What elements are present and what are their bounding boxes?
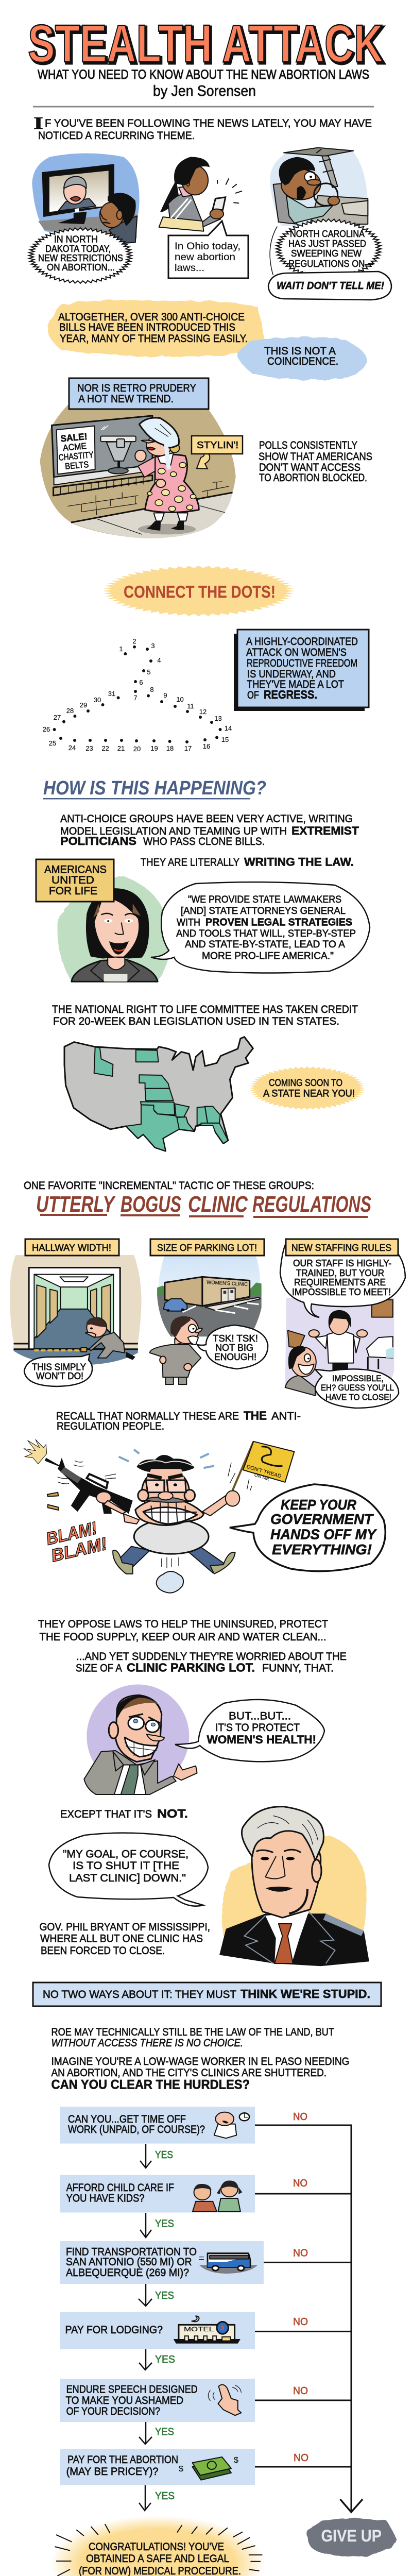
callout: regress: THEY'VE MADE A LOT <box>247 679 344 690</box>
speech bubble: proven legal strategies: PROVEN LEGAL STRATEGIES <box>205 917 352 928</box>
connect-the-dots puzzle <box>43 637 232 753</box>
speech bubble: wait: WAIT! DON'T TELL ME! <box>277 280 384 292</box>
panel: protect women's health politician <box>84 1684 324 1794</box>
text: they oppose laws: THEY OPPOSE LAWS TO HELP THE UNINSURED, PROTECT <box>38 1618 328 1630</box>
text: suddenly worried: FUNNY, THAT. <box>262 1662 334 1674</box>
heading: utterly bogus clinic regulations: CLINIC <box>188 1192 248 1217</box>
flag text: don't tread on me <box>244 1464 282 1485</box>
burst: north dakota: ON ABORTION... <box>47 262 115 273</box>
box: transportation <box>60 2241 264 2284</box>
text: incremental tactic: ONE FAVORITE "INCREMENTAL" TACTIC OF THESE GROUPS: <box>24 1180 314 1192</box>
burst: north carolina <box>276 219 381 279</box>
text: anti-regulation people: ANTI- <box>271 1411 301 1422</box>
connect-the-dots puzzle: 29 <box>80 701 87 709</box>
speech bubble: but it's to protect women's health: BUT...BUT... <box>229 1710 291 1722</box>
speech bubble: impossible to meet: TRAINED, BUT YOUR <box>296 1268 384 1278</box>
sign: chastity belts sale: CHASTITY <box>58 450 94 463</box>
callout: regress: ATTACK ON WOMEN'S <box>246 647 347 658</box>
speech bubble: keep your government hands off: GOVERNMENT <box>270 1511 374 1527</box>
text: except that it's not <box>60 1807 188 1820</box>
sound effect: blam: BLAM! <box>44 1518 99 1549</box>
illustration: gun-toting tea partier <box>24 1439 385 1593</box>
connect-the-dots puzzle: 7 <box>133 694 138 702</box>
box: lodging <box>60 2312 255 2349</box>
box: lodging: MOTEL <box>184 2326 214 2333</box>
intro text: I <box>33 114 43 133</box>
labels: no: NO <box>294 2452 308 2464</box>
box: pay for abortion: PAY FOR THE ABORTION <box>67 2454 178 2466</box>
portrait: gov. phil bryant <box>219 1807 369 1966</box>
burst: coming soon: A STATE NEAR YOU! <box>263 1088 355 1099</box>
text: roe and hurdles: WITHOUT ACCESS THERE IS NO CHOICE. <box>52 2037 243 2049</box>
box: shaming speech: TO MAKE YOU ASHAMED <box>66 2395 183 2406</box>
box: shaming speech: ENDURE SPEECH DESIGNED <box>66 2383 198 2396</box>
speech bubble: my goal <box>49 1833 208 1906</box>
caption: not a coincidence <box>238 337 367 380</box>
text: anti-choice groups <box>60 813 359 848</box>
speech bubble: proven legal strategies: AND STATE-BY-STATE, LEAD TO A <box>185 939 345 950</box>
box: pay for abortion <box>60 2449 255 2485</box>
speech bubble: proven legal strategies: [AND] STATE ATTORNEYS GENERAL <box>181 906 346 917</box>
box: time off work: WORK (UNPAID, OF COURSE)? <box>68 2124 205 2136</box>
callout: ohio: laws... <box>175 263 204 274</box>
callout: they must think we're stupid: NO TWO WAYS ABOUT IT: THEY MUST <box>43 1989 236 2001</box>
outcome: congratulations <box>50 2516 265 2576</box>
heading: how is this happening: HOW IS THIS HAPPENING? <box>43 777 266 799</box>
speech bubble: proven legal strategies: AND TOOLS THAT WILL, STEP-BY-STEP <box>176 928 356 939</box>
labels: no: NO <box>293 2385 308 2397</box>
text: roe and hurdles: CAN YOU CLEAR THE HURDLES? <box>52 2078 250 2092</box>
speech bubble: impossible to meet: OUR STAFF IS HIGHLY- <box>293 1258 391 1268</box>
caption: gov. phil bryant: WHERE ALL BUT ONE CLINIC HAS <box>40 1933 203 1944</box>
speech bubble: proven legal strategies <box>151 882 370 973</box>
text: roe and hurdles: IMAGINE YOU'RE A LOW-WAGE WORKER IN EL PASO NEEDING <box>52 2056 349 2067</box>
text: polls: TO ABORTION BLOCKED. <box>259 472 367 484</box>
intro text: NOTICED A RECURRING THEME. <box>38 130 195 142</box>
speech bubble: impossible to meet: IMPOSSIBLE TO MEET! <box>292 1287 391 1297</box>
burst: north dakota: IN NORTH <box>54 234 98 244</box>
box: shaming speech: OF YOUR DECISION? <box>66 2405 160 2417</box>
text: roe and hurdles: AN ABORTION, AND THE CITY'S CLINICS ARE SHUTTERED. <box>52 2067 327 2079</box>
burst: north dakota <box>29 228 132 283</box>
connect-the-dots puzzle: 25 <box>49 739 56 747</box>
flag text: don't tread on me: DON'T TREAD <box>246 1464 282 1480</box>
connect-the-dots puzzle: 6 <box>139 679 143 686</box>
panel: retro prudery <box>40 378 243 538</box>
speech bubble: impossible to meet: REQUIREMENTS ARE <box>294 1277 386 1287</box>
text: anti-regulation people: REGULATION PEOPLE. <box>57 1420 164 1432</box>
connect-the-dots puzzle: 12 <box>199 708 207 716</box>
callout: ohio <box>168 221 248 278</box>
panel: hallway width <box>10 1239 142 1386</box>
map: states with 20-week bans <box>64 1037 253 1151</box>
callout: regress: IS UNDERWAY, AND <box>247 668 336 680</box>
callout: regress: A HIGHLY-COORDINATED <box>246 636 358 648</box>
labels: no <box>293 2111 308 2464</box>
callout: they must think we're stupid: THINK WE'RE STUPID. <box>241 1987 370 2001</box>
text: anti-regulation people: THE <box>244 1409 267 1422</box>
labels: yes: YES <box>155 2490 175 2502</box>
box: time off work: CAN YOU...GET TIME OFF <box>68 2113 186 2125</box>
callout: ohio: In Ohio today, <box>175 241 241 252</box>
speech bubble: but it's to protect women's health: WOMEN'S HEALTH! <box>207 1733 316 1746</box>
text: writing the law: WRITING THE LAW. <box>244 856 354 869</box>
box: pay for abortion: $ <box>179 2465 183 2473</box>
connect-the-dots puzzle: 3 <box>151 642 155 650</box>
box: time off work <box>60 2107 255 2144</box>
speech bubble: keep your government hands off: EVERYTHING! <box>272 1541 372 1557</box>
speech bubble: but it's to protect women's health <box>175 1700 324 1761</box>
connect-the-dots puzzle: 5 <box>147 668 151 676</box>
speech bubble: proven legal strategies: "WE PROVIDE STATE LAWMAKERS <box>188 894 341 905</box>
connect-the-dots puzzle: 24 <box>68 744 76 752</box>
speech bubble: my goal: LAST CLINIC] DOWN." <box>69 1872 186 1884</box>
sign: chastity belts sale: ACME <box>62 441 87 453</box>
labels: no: NO <box>293 2178 307 2189</box>
caption: gov. phil bryant <box>39 1921 210 1957</box>
outcome: congratulations: OBTAINED A SAFE AND LEGAL <box>86 2553 229 2565</box>
text: national right to life: THE NATIONAL RIGHT TO LIFE COMMITTEE HAS TAKEN CREDIT <box>52 1004 358 1015</box>
sound effect: blam <box>44 1517 109 1566</box>
speech bubble: keep your government hands off: HANDS OFF MY <box>270 1527 377 1543</box>
labels: yes: YES <box>155 2290 174 2301</box>
callout: ohio: new abortion <box>175 252 235 263</box>
text: except that it's not: EXCEPT THAT IT'S <box>60 1808 152 1820</box>
label: hallway width <box>25 1239 119 1256</box>
text: polls: DON'T WANT ACCESS <box>259 462 360 473</box>
panel: size of parking lot <box>150 1239 268 1384</box>
connect-the-dots puzzle: 17 <box>184 744 192 752</box>
text: writing the law <box>141 856 354 869</box>
text: they oppose laws: THE FOOD SUPPLY, KEEP OUR AIR AND WATER CLEAN... <box>39 1631 327 1643</box>
connect-the-dots puzzle: 10 <box>176 696 184 703</box>
label: new staffing rules <box>286 1239 398 1256</box>
connect-the-dots puzzle: 22 <box>101 744 109 752</box>
sound effect: blam: BLAM! <box>49 1534 109 1566</box>
label: new staffing rules: NEW STAFFING RULES <box>291 1243 391 1253</box>
label: hallway width: HALLWAY WIDTH! <box>32 1243 111 1253</box>
arrows: yes path <box>139 2144 152 2511</box>
text: suddenly worried <box>76 1651 347 1674</box>
flow line: no path to give up <box>255 2125 363 2512</box>
connect-the-dots puzzle: 28 <box>66 707 74 715</box>
heading: utterly bogus clinic regulations: UTTERLY <box>36 1192 116 1217</box>
connect-the-dots puzzle: 13 <box>214 715 222 722</box>
callout: they must think we're stupid <box>33 1982 381 2006</box>
speech bubble: keep your government hands off <box>230 1484 385 1571</box>
label: size of parking lot <box>150 1239 264 1256</box>
connect-the-dots puzzle: 16 <box>203 742 210 750</box>
connect-the-dots puzzle: 21 <box>117 744 125 752</box>
burst: north dakota: NEW RESTRICTIONS <box>38 253 123 263</box>
outcome: give up: GIVE UP <box>321 2527 382 2545</box>
burst: north carolina: REGULATIONS ON— <box>288 259 373 269</box>
text: national right to life: FOR 20-WEEK BAN LEGISLATION USED IN TEN STATES. <box>53 1015 339 1027</box>
text: polls <box>259 439 372 484</box>
connect-the-dots puzzle: 4 <box>157 656 161 664</box>
connect-the-dots puzzle: 20 <box>133 745 141 753</box>
connect-the-dots puzzle: 19 <box>150 744 158 752</box>
speech bubble: proven legal strategies: MORE PRO-LIFE AMERICA." <box>202 951 334 962</box>
icon: dust cloud <box>157 1571 183 1593</box>
caption: 300 bills: YEAR, MANY OF THEM PASSING EASILY. <box>60 333 248 345</box>
connect-the-dots puzzle: 8 <box>150 686 154 693</box>
speech bubble: proven legal strategies: WITH <box>177 917 200 928</box>
connect-the-dots puzzle: 2 <box>132 637 136 645</box>
speech bubble: this simply won't do: THIS SIMPLY <box>32 1362 86 1372</box>
burst: coming soon <box>249 1066 365 1110</box>
text: anti-regulation people: RECALL THAT NORMALLY THESE ARE <box>56 1411 239 1422</box>
sign: chastity belts sale: BELTS <box>64 460 89 471</box>
box: shaming speech <box>60 2379 255 2422</box>
connect-the-dots puzzle: 1 <box>119 645 123 653</box>
speech bubble: tsk tsk: NOT BIG <box>215 1343 253 1353</box>
panel: new staffing rules <box>280 1239 405 1408</box>
labels: no: NO <box>293 2247 308 2259</box>
connect-the-dots puzzle: 23 <box>85 744 93 752</box>
text: suddenly worried: SIZE OF A <box>76 1662 122 1674</box>
speech bubble: guess you'll have to close <box>315 1369 399 1408</box>
speech bubble: wait <box>268 227 391 300</box>
burst: north carolina: NORTH CAROLINA <box>290 229 365 239</box>
connect-the-dots puzzle: 30 <box>94 696 101 704</box>
text: polls: SHOW THAT AMERICANS <box>259 451 372 463</box>
intro text: F YOU'VE BEEN FOLLOWING THE NEWS LATELY, YOU MAY HAVE <box>45 117 372 129</box>
burst: north carolina: SWEEPING NEW <box>291 248 362 259</box>
outcome: congratulations: CONGRATULATIONS! YOU'VE <box>89 2541 224 2553</box>
text: suddenly worried: ...AND YET SUDDENLY THEY'RE WORRIED ABOUT THE <box>76 1651 347 1663</box>
caption: 300 bills: BILLS HAVE BEEN INTRODUCED THIS <box>59 321 235 333</box>
callout: regress: REGRESS. <box>264 688 317 701</box>
callout: regress: REPRODUCTIVE FREEDOM <box>247 657 357 669</box>
connect-the-dots puzzle: 14 <box>225 724 232 732</box>
connect-the-dots puzzle: 15 <box>221 736 229 743</box>
labels: yes <box>155 2149 175 2502</box>
text: anti-choice groups: ANTI-CHOICE GROUPS HAVE BEEN VERY ACTIVE, WRITING <box>60 813 353 825</box>
labels: yes: YES <box>155 2149 173 2161</box>
text: roe and hurdles <box>52 2026 349 2092</box>
labels: yes: YES <box>155 2218 174 2230</box>
panel: north dakota tv <box>29 154 140 283</box>
connect-the-dots puzzle: 27 <box>54 714 61 721</box>
connect-the-dots puzzle: 9 <box>163 691 167 699</box>
caption: gov. phil bryant: GOV. PHIL BRYANT OF MISSISSIPPI, <box>39 1921 210 1933</box>
speech bubble: impossible to meet <box>280 1239 405 1317</box>
box: child care: AFFORD CHILD CARE IF <box>66 2182 174 2194</box>
speech bubble: this simply won't do: WON'T DO! <box>36 1371 83 1381</box>
box: lodging: 3 <box>220 2324 224 2332</box>
sign: chastity belts sale <box>57 431 95 472</box>
box: transportation: FIND TRANSPORTATION TO <box>66 2246 197 2258</box>
burst: connect the dots <box>103 566 295 616</box>
sign: americans united for life <box>36 859 114 902</box>
burst: north dakota: DAKOTA TODAY, <box>45 244 111 254</box>
callout box: retro prudery: A HOT NEW TREND. <box>78 393 174 405</box>
speech bubble: my goal: IS TO SHUT IT [THE <box>73 1860 179 1872</box>
connect-the-dots puzzle: 11 <box>187 702 194 710</box>
label: size of parking lot: SIZE OF PARKING LOT! <box>157 1243 257 1253</box>
labels: no: NO <box>293 2111 307 2123</box>
callout box: retro prudery <box>69 378 209 409</box>
flowchart <box>60 2107 363 2512</box>
speech bubble: guess you'll have to close: IMPOSSIBLE, <box>332 1374 384 1383</box>
caption: not a coincidence: THIS IS NOT A <box>264 345 336 357</box>
box: transportation: SAN ANTONIO (550 MI) OR <box>66 2256 192 2268</box>
text: anti-choice groups: EXTREMIST <box>291 824 359 837</box>
text: anti-choice groups: MODEL LEGISLATION AND TEAMING UP WITH <box>60 825 287 837</box>
text: anti-choice groups: WHO PASS CLONE BILLS. <box>143 836 265 848</box>
panel: north carolina car <box>268 148 391 300</box>
text: anti-choice groups: POLITICIANS <box>60 835 136 848</box>
labels: yes: YES <box>155 2427 174 2438</box>
speech bubble: keep your government hands off: KEEP YOUR <box>281 1497 357 1513</box>
text: suddenly worried: CLINIC PARKING LOT. <box>127 1661 255 1674</box>
labels: no: NO <box>293 2316 308 2328</box>
panel: ohio phone <box>159 157 248 278</box>
speech bubble: this simply won't do <box>24 1354 92 1386</box>
speech bubble: but it's to protect women's health: IT'S TO PROTECT <box>215 1722 300 1734</box>
sign: americans united for life: FOR LIFE <box>49 885 97 897</box>
callout: regress: OF <box>247 689 259 701</box>
text: roe and hurdles: ROE MAY TECHNICALLY STILL BE THE LAW OF THE LAND, BUT <box>52 2026 334 2038</box>
sign: chastity belts sale: SALE! <box>60 431 88 444</box>
connect-the-dots puzzle: 31 <box>108 690 115 698</box>
connect-the-dots puzzle: 18 <box>166 744 174 752</box>
outcome: give up <box>307 2518 397 2557</box>
heading: utterly bogus clinic regulations: REGULATIONS <box>252 1192 371 1217</box>
text: writing the law: THEY ARE LITERALLY <box>141 857 239 869</box>
speech bubble: guess you'll have to close: HAVE TO CLOSE! <box>325 1392 391 1402</box>
box: pay for abortion: (MAY BE PRICEY)? <box>66 2466 159 2478</box>
speech bubble: guess you'll have to close: EH? GUESS YOU'LL <box>321 1383 394 1393</box>
burst: connect the dots: CONNECT THE DOTS! <box>124 582 276 601</box>
label: women's clinic sign: WOMEN'S CLINIC <box>207 1280 248 1287</box>
speech bubble: tsk tsk <box>197 1325 268 1369</box>
box: child care: YOU HAVE KIDS? <box>66 2193 145 2205</box>
intro text <box>33 114 372 142</box>
text: anti-regulation people <box>56 1409 301 1432</box>
byline: by Jen Sorensen <box>153 83 256 99</box>
speech bubble: tsk tsk: TSK! TSK! <box>213 1333 258 1344</box>
text: they oppose laws <box>38 1618 328 1643</box>
box: child care <box>60 2175 255 2212</box>
burst: coming soon: COMING SOON TO <box>269 1078 342 1089</box>
speech bubble: tsk tsk: ENOUGH! <box>214 1352 256 1362</box>
caption: 300 bills: ALTOGETHER, OVER 300 ANTI-CHOICE <box>58 311 245 323</box>
heading: utterly bogus clinic regulations <box>36 1192 371 1218</box>
box: pay for abortion: $ <box>234 2456 238 2465</box>
label: stylin arrow <box>192 436 243 469</box>
portrait: americans united for life spokeswoman <box>36 859 169 981</box>
callout: regress <box>234 630 369 711</box>
labels: yes: YES <box>155 2354 175 2365</box>
text: national right to life <box>52 1004 358 1027</box>
callout box: retro prudery: NOR IS RETRO PRUDERY <box>77 382 196 394</box>
text: polls: POLLS CONSISTENTLY <box>259 439 357 451</box>
box: transportation: ALBEQUERQUE (269 MI)? <box>66 2267 189 2279</box>
connect-the-dots puzzle: 26 <box>43 725 50 733</box>
caption: gov. phil bryant: BEEN FORCED TO CLOSE. <box>41 1945 165 1957</box>
caption: not a coincidence: COINCIDENCE. <box>267 355 338 367</box>
heading: utterly bogus clinic regulations: BOGUS <box>121 1192 181 1217</box>
speech bubble: my goal: "MY GOAL, OF COURSE, <box>63 1849 188 1860</box>
sign: americans united for life: AMERICANS <box>44 863 107 876</box>
burst: north carolina: HAS JUST PASSED <box>288 239 366 249</box>
label: stylin arrow: STYLIN'! <box>197 440 238 450</box>
box: lodging: PAY FOR LODGING? <box>65 2324 163 2336</box>
text: except that it's not: NOT. <box>157 1807 188 1820</box>
caption: 300 bills <box>47 300 264 357</box>
sign: americans united for life: UNITED <box>52 874 94 886</box>
flag text: don't tread on me: ON ME <box>253 1472 270 1482</box>
